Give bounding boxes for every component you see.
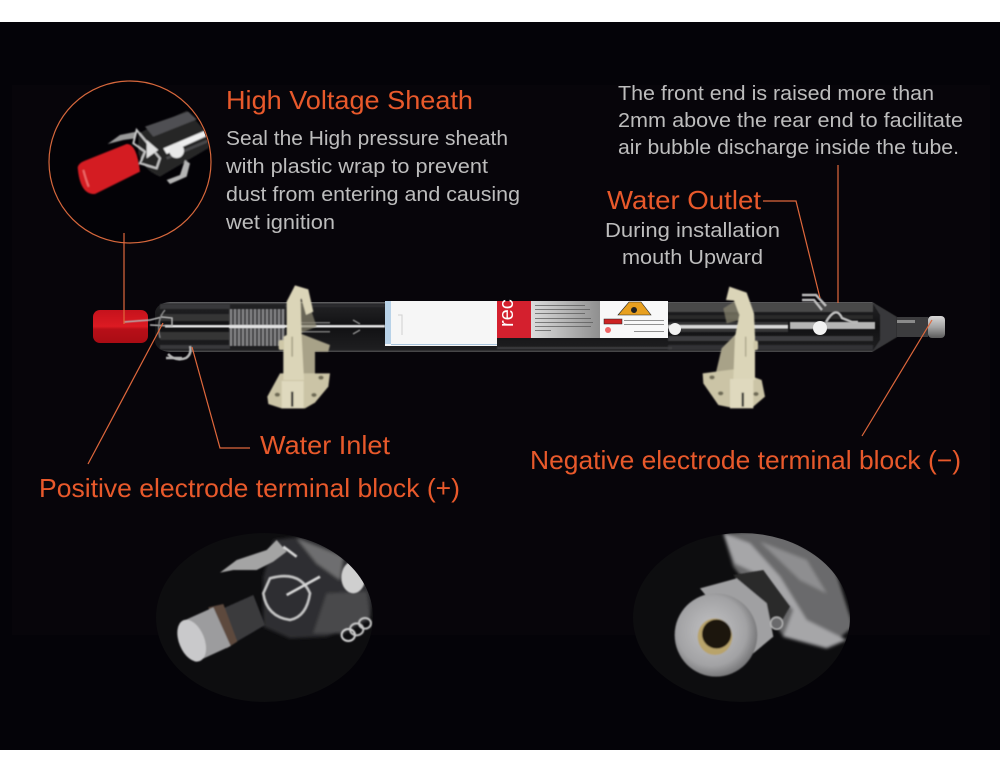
text block: front end note: 2mm above the rear end to facilitate xyxy=(618,109,963,132)
leader line: front end xyxy=(837,165,839,303)
text block: front end note: air bubble discharge inside the tube. xyxy=(618,136,959,159)
glass reflections xyxy=(160,302,897,352)
glass tube body xyxy=(155,302,928,352)
photo: right terminal close-up xyxy=(633,530,853,702)
positive electrode details xyxy=(124,310,360,359)
heading: high voltage sheath: High Voltage Sheath xyxy=(226,85,473,115)
text block: sheath description: with plastic wrap to prevent xyxy=(225,155,488,178)
text block: water outlet note: mouth Upward xyxy=(622,246,763,269)
heading: positive terminal: Positive electrode terminal block (+) xyxy=(39,473,460,503)
leader line: water outlet xyxy=(763,201,820,298)
text block: water outlet note xyxy=(605,219,780,269)
left mounting bracket xyxy=(267,285,330,408)
leader line: negative terminal xyxy=(862,320,932,436)
text block: sheath description: Seal the High pressure sheath xyxy=(226,127,508,150)
right mounting bracket xyxy=(703,287,765,408)
red high voltage cap xyxy=(93,310,148,343)
heading: negative terminal: Negative electrode terminal block (−) xyxy=(530,445,961,475)
negative terminal xyxy=(897,316,945,338)
laser warning icon xyxy=(618,302,651,315)
text block: front end note xyxy=(618,82,963,159)
round sticker xyxy=(813,321,827,335)
leader line: sheath xyxy=(123,233,125,324)
leader line: water inlet xyxy=(192,347,250,448)
water outlet nozzle xyxy=(802,295,858,322)
text block: water outlet note: During installation xyxy=(605,219,780,242)
tube label xyxy=(385,299,668,346)
heading: water inlet: Water Inlet xyxy=(260,430,391,460)
text block: sheath description: dust from entering and causing xyxy=(226,183,520,206)
inset circle: high voltage sheath xyxy=(49,81,217,243)
text block: front end note: The front end is raised more than xyxy=(618,82,934,105)
tube label: rec xyxy=(496,299,518,327)
laser tube assembly xyxy=(93,285,945,408)
photo: left terminal close-up xyxy=(156,533,373,702)
heading: water outlet: Water Outlet xyxy=(607,185,762,215)
leader line: positive terminal xyxy=(88,323,163,464)
gas coil xyxy=(229,309,285,346)
text block: sheath description xyxy=(225,127,520,234)
text block: sheath description: wet ignition xyxy=(225,211,335,234)
